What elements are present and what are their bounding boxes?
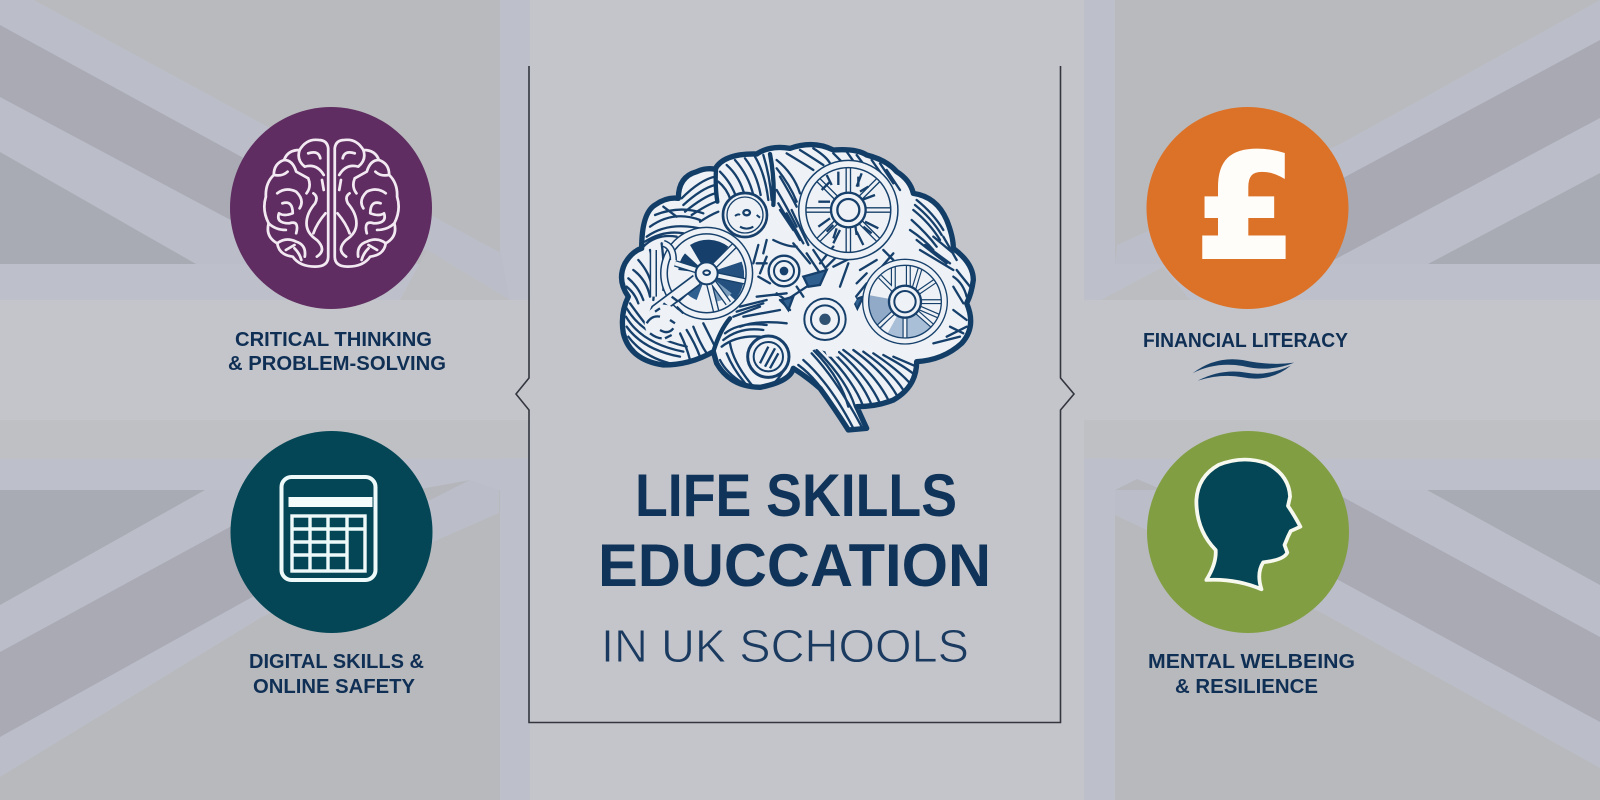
title: LIFE SKILLS [635, 462, 957, 529]
gear: right wheel [866, 262, 944, 341]
top-left diagonals [0, 0, 510, 300]
skill: financial literacy [1143, 107, 1348, 381]
label: financial literacy: FINANCIAL LITERACY [1143, 329, 1348, 352]
central frame [516, 66, 1074, 722]
label: mental wellbeing: MENTAL WELBEING [1148, 650, 1355, 673]
icon: orange circle with pound sign [1146, 107, 1348, 309]
icon: wave flourish [1193, 359, 1294, 381]
icon: purple circle with brain [230, 107, 432, 309]
gear: centre small [769, 256, 799, 286]
icon: green circle with head silhouette [1147, 431, 1349, 633]
label: critical thinking: & PROBLEM-SOLVING [228, 352, 446, 375]
gear: bottom-left blob [645, 305, 683, 342]
bottom-right diagonals [1115, 479, 1600, 768]
label: digital skills: ONLINE SAFETY [253, 675, 415, 698]
title [598, 462, 991, 672]
label: mental wellbeing: & RESILIENCE [1175, 675, 1318, 698]
gear: left wheel [650, 231, 749, 327]
gear: lower small [748, 336, 789, 377]
label: critical thinking [228, 328, 446, 375]
icon: orange circle with pound sign: £ [1196, 126, 1295, 290]
gear: small top [723, 193, 767, 237]
gear: solid white cog [796, 287, 864, 357]
label: critical thinking: CRITICAL THINKING [235, 328, 432, 351]
skill: digital skills [230, 431, 432, 698]
central brain with gears illustration [622, 145, 973, 430]
skill: mental wellbeing [1147, 431, 1355, 698]
gear: large top right [802, 164, 894, 256]
subtitle: IN UK SCHOOLS [601, 620, 969, 672]
title: EDUCCATION [598, 532, 991, 599]
bottom-left diagonals [0, 480, 499, 777]
skill: critical thinking [228, 107, 446, 375]
label: digital skills [249, 650, 424, 698]
icon: teal circle with calculator [230, 431, 432, 633]
label: mental wellbeing [1148, 650, 1355, 698]
brain outline [622, 145, 973, 430]
top-right diagonals [1115, 0, 1600, 264]
label: financial literacy [1143, 329, 1348, 381]
label: digital skills: DIGITAL SKILLS & [249, 650, 424, 673]
